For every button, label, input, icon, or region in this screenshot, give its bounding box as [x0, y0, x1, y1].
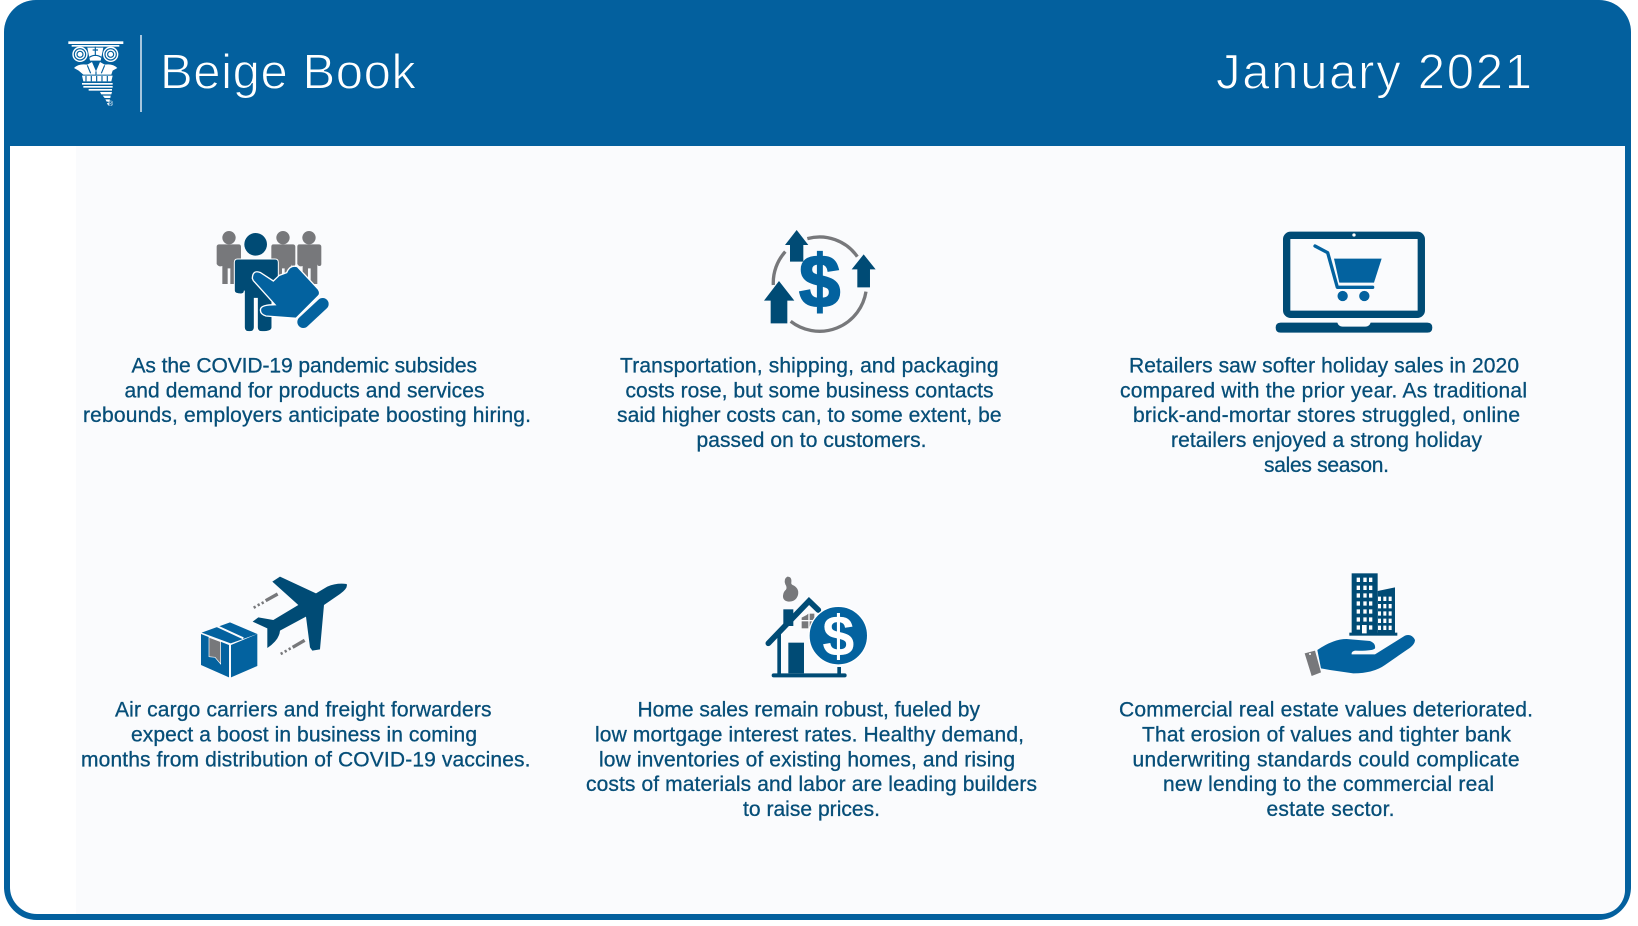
text: home sales: costs of materials and labor are leading builders	[586, 773, 1037, 796]
registered mark: ®	[108, 100, 114, 108]
text: retail: sales season.	[1264, 454, 1389, 477]
coin dollar sign: $	[822, 605, 854, 669]
text: transportation costs: costs rose, but some business contacts	[626, 379, 994, 402]
date: January 2021	[1216, 46, 1532, 100]
text: air cargo: expect a boost in business in coming	[131, 724, 477, 746]
text: transportation costs: Transportation, shipping, and packaging	[620, 354, 998, 378]
text: retail: retailers enjoyed a strong holiday	[1171, 429, 1482, 452]
text: retail: Retailers saw softer holiday sales in 2020	[1129, 354, 1519, 378]
text: transportation costs: passed on to customers.	[696, 429, 926, 452]
text: air cargo	[81, 699, 530, 771]
icon: dollar with up arrows	[764, 230, 876, 331]
text: commercial real estate	[1119, 699, 1533, 821]
content panel	[1598, 888, 1625, 914]
text: hiring	[83, 354, 531, 427]
text: home sales: low inventories of existing homes, and rising	[599, 748, 1015, 771]
text: hiring: rebounds, employers anticipate boosting hiring.	[83, 404, 531, 427]
icon: air cargo plane and box	[201, 577, 347, 677]
text: commercial real estate: underwriting standards could complicate	[1132, 748, 1520, 771]
text: air cargo: Air cargo carriers and freight forwarders	[115, 699, 492, 722]
icon: hand holding building	[1305, 573, 1415, 676]
logo	[68, 41, 123, 106]
text: hiring: As the COVID-19 pandemic subsides	[132, 354, 477, 378]
icon: people with pointing hand	[217, 231, 323, 332]
text: home sales	[586, 699, 1037, 821]
text: hiring: and demand for products and services	[124, 379, 484, 402]
text: commercial real estate: new lending to the commercial real	[1163, 773, 1494, 796]
text: retail	[1120, 354, 1527, 477]
text: retail: brick-and-mortar stores struggled, online	[1133, 404, 1520, 427]
text: home sales: low mortgage interest rates. Healthy demand,	[595, 724, 1024, 746]
logo divider	[140, 35, 142, 112]
text: home sales: Home sales remain robust, fueled by	[638, 699, 980, 722]
icon: house with dollar coin	[768, 577, 868, 675]
dollar sign: $	[799, 240, 840, 323]
header band	[4, 0, 1631, 146]
text: transportation costs	[617, 354, 1002, 452]
text: transportation costs: said higher costs can, to some extent, be	[617, 404, 1002, 427]
text: commercial real estate: estate sector.	[1266, 798, 1394, 821]
text: retail: compared with the prior year. As traditional	[1120, 379, 1527, 402]
text: air cargo: months from distribution of COVID-19 vaccines.	[81, 748, 530, 771]
text: commercial real estate: That erosion of values and tighter bank	[1142, 724, 1512, 746]
text: home sales: to raise prices.	[743, 798, 880, 821]
text: commercial real estate: Commercial real estate values deteriorated.	[1119, 699, 1533, 722]
icon: laptop with shopping cart	[1276, 233, 1432, 333]
title: Beige Book	[160, 46, 416, 100]
